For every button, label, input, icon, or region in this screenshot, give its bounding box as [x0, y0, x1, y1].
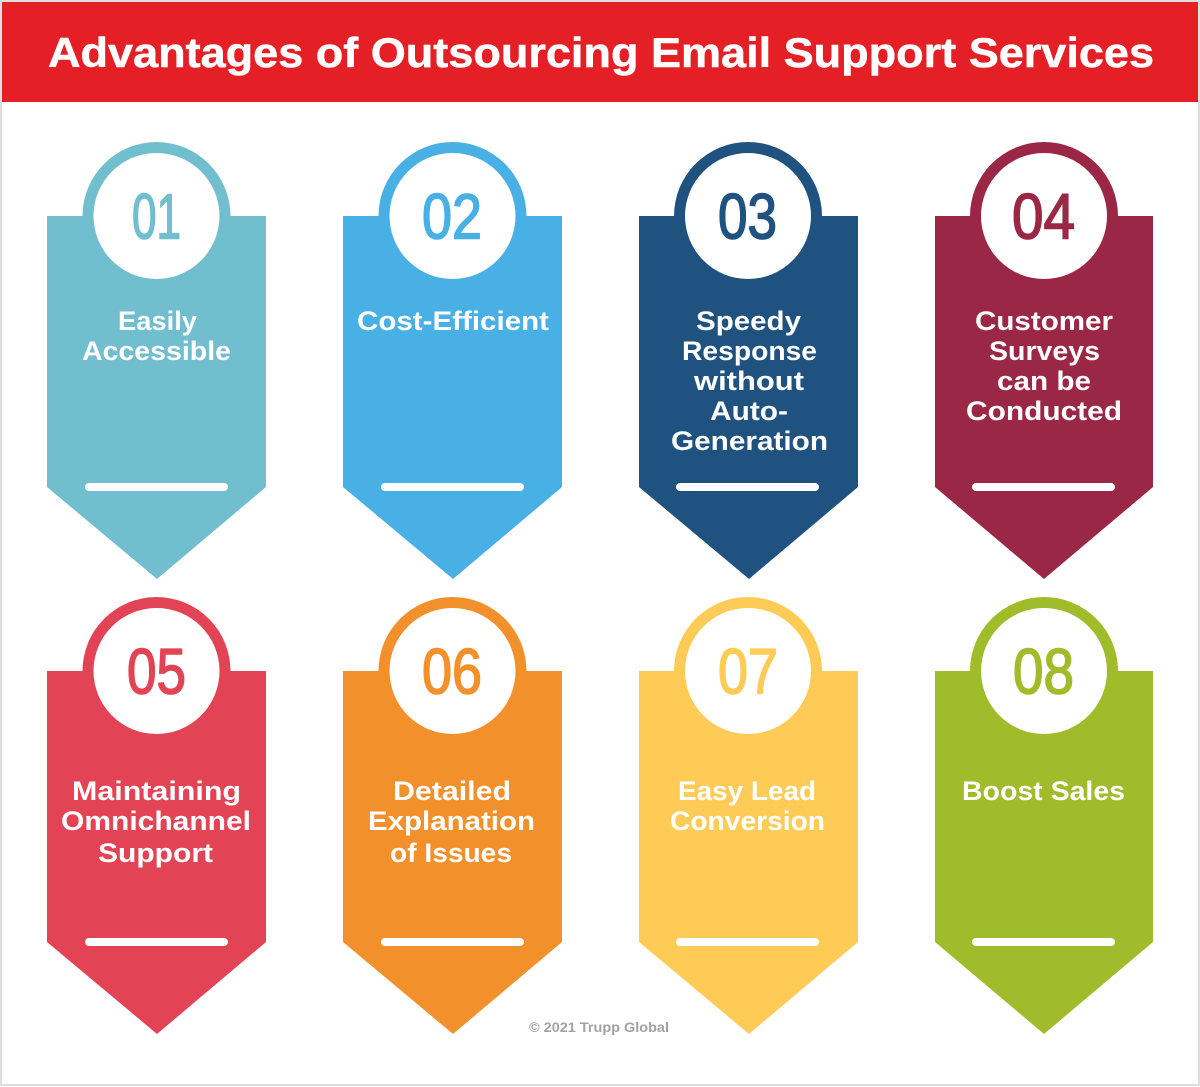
panel: 03 Speedy Response without Auto-Generation: Generation: [671, 426, 828, 456]
panel: 08 Boost Sales: [935, 597, 1153, 1034]
copyright footer: © 2021 Trupp Global: [529, 1020, 669, 1035]
panel: 04 Customer Surveys can be Conducted: [935, 142, 1153, 579]
panel: 03 Speedy Response without Auto-Generation: [639, 142, 858, 579]
panel: 07 Easy Lead Conversion: Conversion: [670, 806, 825, 836]
panel: 07 Easy Lead Conversion: [639, 597, 858, 1034]
panel: 04 Customer Surveys can be Conducted: Customer: [975, 306, 1113, 336]
panel: 04 Customer Surveys can be Conducted: 04: [1012, 180, 1075, 252]
panel: 08 Boost Sales: Boost Sales: [962, 776, 1125, 806]
panel: 04 Customer Surveys can be Conducted: can be: [997, 366, 1091, 396]
panel: 03 Speedy Response without Auto-Generation: without: [693, 366, 804, 396]
panel: 05 Maintaining Omnichannel Support: Support: [98, 838, 213, 868]
panel: 03 Speedy Response without Auto-Generation: Response: [682, 336, 817, 366]
panel: 02 Cost-Efficient: Cost-Efficient: [357, 306, 549, 336]
panel: 02 Cost-Efficient: [343, 142, 562, 579]
panel: 05 Maintaining Omnichannel Support: [47, 597, 266, 1034]
panel: 06 Detailed Explanation of Issues: Detailed: [393, 776, 511, 806]
panel: 05 Maintaining Omnichannel Support: Maintaining: [72, 776, 241, 806]
panel: 05 Maintaining Omnichannel Support: Omnichannel: [61, 806, 251, 836]
panel: 01 Easily Accessible: Easily: [118, 306, 197, 336]
panel: 06 Detailed Explanation of Issues: [343, 597, 562, 1034]
title banner: Advantages of Outsourcing Email Support Services: [48, 29, 1154, 76]
panel: 04 Customer Surveys can be Conducted: Surveys: [989, 336, 1100, 366]
title banner: [2, 2, 1198, 102]
panel: 01 Easily Accessible: Accessible: [82, 336, 231, 366]
panel: 01 Easily Accessible: [47, 142, 266, 579]
panel: 02 Cost-Efficient: 02: [422, 180, 482, 252]
panel: 05 Maintaining Omnichannel Support: 05: [127, 636, 186, 708]
panel: 03 Speedy Response without Auto-Generation: 03: [718, 180, 777, 252]
panel: 01 Easily Accessible: 01: [132, 180, 181, 252]
panel: 07 Easy Lead Conversion: Easy Lead: [678, 776, 816, 806]
panel: 06 Detailed Explanation of Issues: 06: [422, 636, 482, 708]
panel: 08 Boost Sales: 08: [1013, 636, 1074, 708]
panel: 03 Speedy Response without Auto-Generation: Speedy: [696, 306, 801, 336]
panel: 03 Speedy Response without Auto-Generation: Auto-: [710, 396, 788, 426]
panel: 06 Detailed Explanation of Issues: of Issues: [390, 838, 512, 868]
panel: 04 Customer Surveys can be Conducted: Conducted: [966, 396, 1122, 426]
panel: 07 Easy Lead Conversion: 07: [718, 636, 778, 708]
panel: 06 Detailed Explanation of Issues: Explanation: [368, 806, 535, 836]
